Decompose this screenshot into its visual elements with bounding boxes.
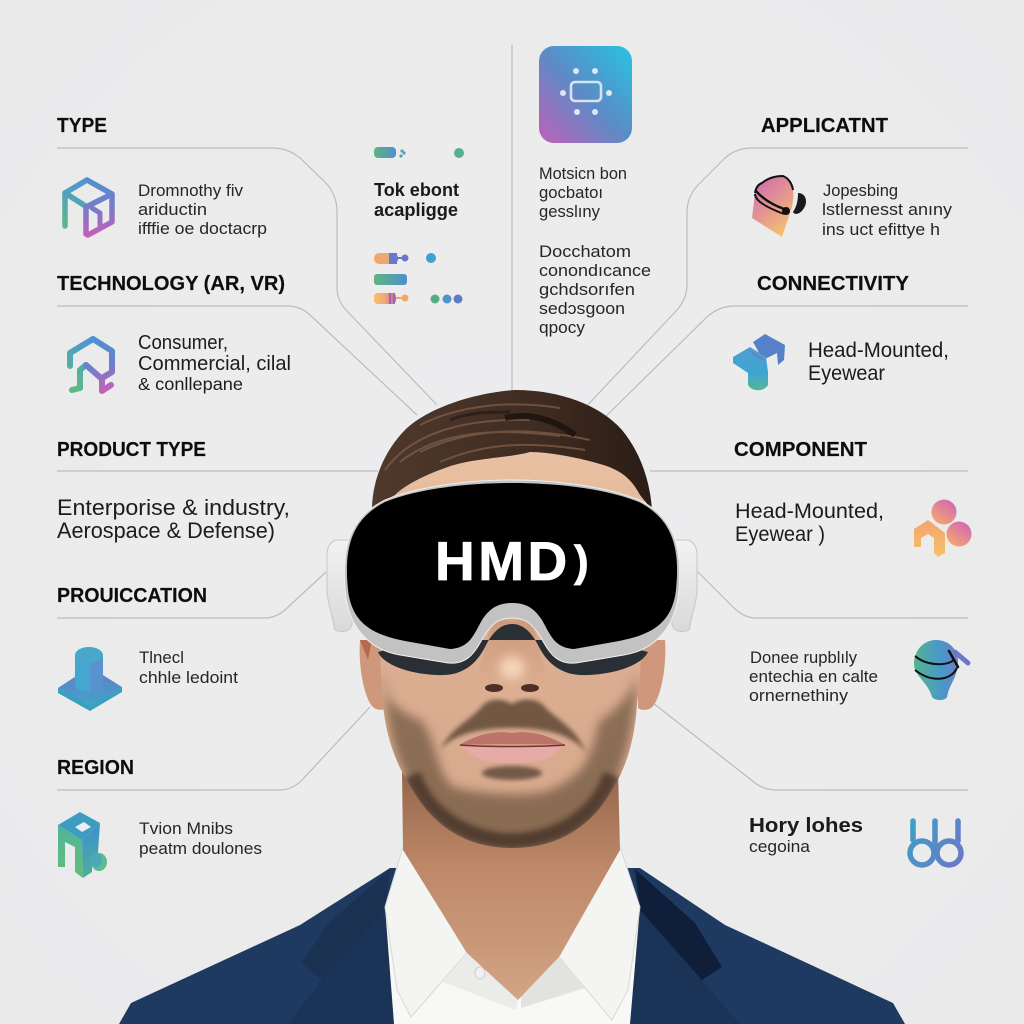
dark gasket: [378, 624, 648, 675]
panel: connectivity: [733, 273, 949, 390]
description: [139, 648, 238, 687]
icon: rings: [910, 821, 961, 865]
description: [822, 181, 953, 239]
heading: PRODUCT TYPE: [57, 439, 206, 461]
heading: TECHNOLOGY (AR, VR): [57, 273, 285, 295]
heading: REGION: [57, 757, 134, 779]
panel: product type: [57, 439, 290, 543]
description: Aerospace & Defense): [57, 518, 275, 543]
description: Jopesbing: [823, 181, 898, 200]
upper text: gocbatoı: [539, 183, 603, 202]
panel: center left: [374, 147, 464, 304]
face: [379, 450, 645, 848]
description: cegoina: [749, 837, 811, 856]
icon: cylinder on base: [58, 647, 122, 711]
description: Consumer,: [138, 332, 228, 354]
neck: [402, 770, 620, 1000]
panel: technology: [57, 273, 291, 394]
upper text: Motsicn bon: [539, 164, 627, 183]
description: Head-Mounted,: [808, 339, 949, 362]
mini icons bottom: [374, 253, 462, 304]
icon: cube: [65, 180, 112, 235]
panel: component: [734, 439, 972, 557]
icon: house glyph: [70, 339, 112, 391]
panel: right lower two: [749, 815, 961, 865]
nose: [477, 620, 547, 697]
mini icons top: [374, 147, 464, 158]
description: Eyewear ): [735, 523, 825, 546]
description: [735, 500, 884, 546]
HMD label: HMD: [435, 530, 571, 592]
description: [57, 495, 290, 543]
mouth: [460, 732, 565, 763]
panel: right lower one: [749, 640, 968, 705]
ears: [360, 640, 665, 710]
heading: COMPONENT: [734, 439, 867, 461]
description: Enterporise & industry,: [57, 495, 290, 520]
lower text: sedɔsgoon: [539, 299, 625, 318]
description: ifffie oe doctacrp: [138, 219, 267, 238]
icon: block: [58, 812, 107, 878]
description: [749, 815, 863, 856]
person wearing HMD headset: [119, 390, 905, 1024]
description: [808, 339, 949, 385]
icon: block: [733, 334, 785, 390]
icon: head with headset: [752, 176, 806, 237]
description: Head-Mounted,: [735, 500, 884, 523]
description: ariductin: [138, 200, 207, 219]
lower text: [539, 242, 651, 337]
icon: spheres and block: [914, 500, 972, 557]
description: ins uct efittye h: [822, 220, 940, 239]
icon: balloon: [914, 640, 968, 700]
app icon: [539, 46, 632, 143]
panel: type: [57, 115, 267, 238]
text block: acapligge: [374, 200, 458, 220]
headset: [327, 480, 697, 675]
description: [138, 332, 291, 394]
description: & conllepane: [138, 374, 243, 394]
heading: PROUICCATION: [57, 585, 207, 607]
hair: [372, 390, 652, 510]
jacket: [119, 868, 905, 1024]
description: lstlernesst anıny: [822, 200, 953, 219]
heading: CONNECTIVITY: [757, 273, 910, 295]
heading: APPLICATNT: [761, 115, 888, 137]
description: Donee rupblıly: [750, 648, 857, 667]
description: Commercial, cilal: [138, 353, 291, 375]
collar button: [475, 967, 485, 979]
HMD label: ): [574, 537, 592, 586]
description: [138, 181, 267, 238]
beard stubble: [383, 670, 637, 848]
side pads: [327, 540, 697, 632]
lower text: Docchatom: [539, 242, 631, 261]
panel: region: [57, 757, 262, 878]
lower text: gchdsorıfen: [539, 280, 635, 299]
description: entechia en calte: [749, 667, 878, 686]
description: Hory lohes: [749, 815, 863, 837]
text block: Tok ebont: [374, 180, 459, 200]
panel: application: [752, 115, 953, 239]
upper text: gesslıny: [539, 202, 600, 221]
panel: prouiccation: [57, 585, 238, 711]
description: Tvion Mnibs: [139, 819, 233, 838]
panel: center right: [539, 46, 651, 337]
text block: [374, 180, 459, 220]
description: Tlnecl: [139, 648, 184, 667]
lower text: conondıcance: [539, 261, 651, 280]
upper text: [539, 164, 627, 221]
black visor: [347, 483, 677, 649]
description: Eyewear: [808, 362, 885, 385]
lower text: qpocy: [539, 318, 585, 337]
silver rim: [344, 480, 680, 663]
description: Dromnothy fiv: [138, 181, 243, 200]
description: peatm doulones: [139, 839, 262, 858]
description: [139, 819, 262, 858]
description: [749, 648, 878, 705]
description: chhle ledoint: [139, 668, 238, 687]
connector lines: [57, 45, 968, 790]
description: ornernethiny: [749, 686, 849, 705]
shirt and collar: [385, 847, 640, 1024]
heading: TYPE: [57, 115, 107, 137]
